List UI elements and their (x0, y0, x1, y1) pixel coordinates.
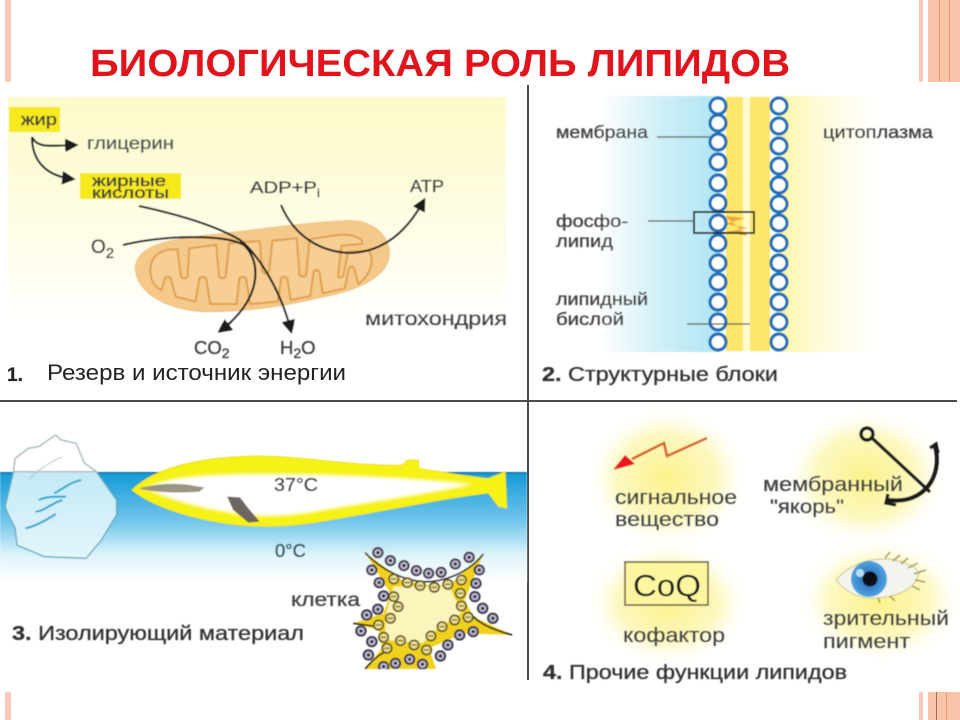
label: ADP+Pi: i (317, 186, 320, 200)
label: signal substance (615, 487, 737, 531)
corner decoration: top left bar (5, 0, 11, 82)
label: lipid bilayer: бислой (556, 309, 624, 329)
glow backgrounds (583, 405, 960, 667)
waterline (0, 472, 527, 474)
panel 1 background (8, 97, 506, 322)
whale (132, 456, 507, 527)
icon: eye (836, 552, 926, 603)
corner decoration: bottom right bars (919, 692, 960, 720)
label: fat (9, 107, 60, 132)
arrow: fat to fatty acids (32, 137, 73, 179)
label: membrane: мембрана (556, 122, 648, 142)
caption panel 1: 1. (7, 365, 23, 386)
arrow: ADP to ATP (281, 200, 424, 253)
leader lines (648, 137, 750, 324)
label: visual pigment: пигмент (823, 631, 910, 653)
title: БИОЛОГИЧЕСКАЯ РОЛЬ ЛИПИДОВ (90, 43, 790, 85)
panel 2: structural blocks (542, 96, 933, 386)
cytoplasm yellow region (779, 96, 879, 352)
bilayer circles (710, 98, 787, 350)
panel 4: other functions (543, 405, 960, 684)
icon: anchor (861, 428, 938, 505)
label: O2: 2 (106, 245, 114, 262)
label: ATP: ATP (410, 176, 444, 196)
phospholipid highlight (725, 216, 748, 236)
label: cofactor: кофактор (623, 625, 725, 647)
panel 1: energy reserve (8, 97, 507, 361)
label: cytoplasm: цитоплазма (823, 122, 933, 142)
corner decoration: top right bars (919, 0, 960, 82)
panel 3: insulating material (0, 435, 527, 683)
label: ADP+Pi: ADP+P (250, 178, 306, 197)
label: lipid bilayer: липидный (556, 289, 648, 309)
caption panel 4: 4. Прочие функции липидов (543, 662, 847, 684)
label: glycerol: глицерин (87, 133, 174, 153)
icon: CoQ box: CoQ (633, 568, 701, 603)
label: membrane anchor: мембранный (763, 474, 903, 496)
label: CO2: CO (194, 337, 222, 358)
label: fatty acids: жирные (92, 173, 166, 190)
arrow: oxygen to carbon dioxide (123, 237, 255, 331)
label: membrane anchor: "якорь" (770, 497, 844, 518)
label: mitochondrion: митохондрия (365, 308, 507, 330)
sea (0, 472, 527, 582)
caption panel 2: 2. Структурные блоки (542, 364, 778, 386)
phospholipid box (694, 212, 754, 233)
label: 0C: 0°C (275, 540, 306, 561)
label: fat: жир (21, 110, 57, 129)
label: CO2: 2 (222, 345, 230, 361)
label: phospholipid (556, 211, 628, 251)
label: visual pigment (823, 608, 949, 653)
caption panel 1: Резерв и источник энергии (47, 360, 346, 385)
label: fatty acids (80, 173, 181, 202)
arrow: fatty acids to water (139, 206, 291, 331)
label: 37C: 37°C (274, 474, 318, 495)
blue outside region (600, 96, 718, 352)
label: signal substance: вещество (615, 509, 719, 531)
icon: signal lightning arrow (613, 438, 707, 470)
label: membrane anchor (763, 474, 903, 518)
label: visual pigment: зрительный (823, 608, 949, 630)
label: signal substance: сигнальное (615, 487, 737, 509)
label: phospholipid: фосфо- (556, 211, 628, 231)
label: phospholipid: липид (556, 231, 613, 251)
label: fatty acids: кислоты (92, 185, 169, 202)
mitochondrion (135, 221, 389, 312)
label: H2O: H (280, 337, 293, 358)
label: O2: O (91, 237, 106, 258)
icon: CoQ box (625, 562, 708, 605)
iceberg (5, 435, 117, 558)
label: cell: клетка (291, 590, 361, 611)
label: lipid bilayer (556, 289, 648, 329)
arrow: fat to glycerol (32, 137, 76, 146)
label: H2O: O (301, 337, 316, 358)
label: H2O: 2 (293, 345, 301, 361)
lipid tails (726, 97, 770, 351)
cell (348, 548, 517, 683)
corner decoration: bottom left bar (5, 692, 11, 720)
caption panel 3: 3. Изолирующий материал (12, 623, 304, 645)
